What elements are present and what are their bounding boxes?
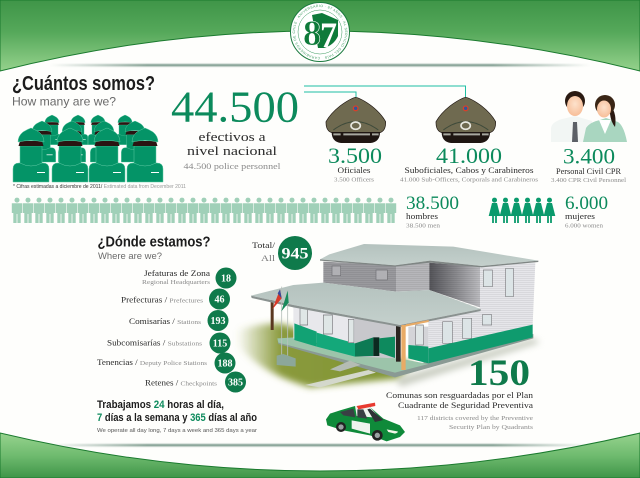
total label: Total/ bbox=[252, 240, 276, 250]
stat: officers: 3.500 Officers bbox=[334, 176, 375, 184]
total personnel figure bbox=[171, 82, 299, 171]
logo: 87 anniversary seal: 8 bbox=[303, 13, 321, 53]
text block: working hours: 7 días a la semana y 365 días al año bbox=[97, 412, 257, 424]
row: prefectures: 46 bbox=[214, 294, 224, 306]
row: substations bbox=[107, 332, 230, 354]
stat: 150 districts bbox=[386, 353, 534, 431]
row: regional headquarters: Regional Headquarters bbox=[142, 279, 211, 286]
stat: women bbox=[565, 193, 608, 230]
icon: officer cap bbox=[326, 97, 386, 143]
stat: 150 districts: 117 districts covered by the Preventive bbox=[417, 415, 533, 422]
heading: where are we: Where are we? bbox=[98, 251, 162, 262]
total badge: 945: 945 bbox=[282, 246, 308, 262]
total label bbox=[252, 240, 276, 263]
text block: working hours: Trabajamos 24 horas al día, bbox=[97, 399, 224, 411]
stat: civil personnel: Personal Civil CPR bbox=[556, 166, 621, 176]
row: checkpoints bbox=[145, 372, 246, 392]
stat: men: 38.500 men bbox=[406, 224, 440, 230]
illustration: police station building bbox=[237, 244, 540, 387]
row: regional headquarters: 18 bbox=[221, 274, 231, 284]
stat: sub-officers: Suboficiales, Cabos y Carabineros bbox=[404, 165, 534, 175]
stat: 150 districts: Comunas son resguardadas por el Plan bbox=[386, 390, 534, 400]
heading: how many are we: How many are we? bbox=[12, 94, 116, 108]
stat: officers: Oficiales bbox=[338, 165, 370, 175]
stat: women: mujeres bbox=[565, 211, 595, 221]
row: prefectures bbox=[121, 288, 230, 310]
icon: group of police officers bbox=[13, 115, 163, 182]
heading: how many are we bbox=[12, 73, 155, 108]
illustration: police car bbox=[326, 403, 405, 441]
icon: sub-officer cap bbox=[436, 97, 496, 143]
connector lines bbox=[304, 86, 466, 97]
stat: 150 districts: 150 bbox=[468, 353, 530, 394]
icon: civil personnel bbox=[551, 91, 627, 142]
pictogram: women row bbox=[489, 198, 555, 223]
text block: working hours: We operate all day long, 7 days a week and 365 days a year bbox=[97, 428, 257, 434]
total personnel figure: 44.500 police personnel bbox=[184, 161, 281, 171]
total label: All bbox=[261, 253, 276, 263]
heading: where are we: ¿Dónde estamos? bbox=[98, 234, 210, 250]
row: checkpoints: Retenes / Checkpoints bbox=[145, 378, 218, 388]
row: deputy police stations bbox=[97, 352, 236, 374]
heading: how many are we: ¿Cuántos somos? bbox=[12, 73, 155, 95]
stat: sub-officers: 41.000 Sub-Officers, Corporals and Carabineros bbox=[400, 176, 539, 184]
row: substations: 115 bbox=[213, 338, 227, 350]
pictogram: men row bbox=[12, 198, 396, 223]
stat: men: 38.500 bbox=[406, 193, 459, 214]
stat: 150 districts: Cuadrante de Seguridad Preventiva bbox=[398, 400, 533, 410]
row: substations: Subcomisarías / Substations bbox=[107, 338, 203, 348]
row: checkpoints: 385 bbox=[228, 378, 243, 388]
total personnel figure: nivel nacional bbox=[187, 143, 277, 158]
logo: 87 anniversary seal: 7 bbox=[320, 15, 337, 55]
row: stations: 193 bbox=[210, 316, 226, 327]
heading: where are we bbox=[98, 234, 210, 262]
row: deputy police stations: 188 bbox=[218, 358, 232, 370]
stat: officers bbox=[328, 143, 382, 184]
stat: women: 6.000 women bbox=[565, 224, 603, 230]
stat: officers: 3.500 bbox=[328, 143, 382, 168]
top green banner bbox=[0, 0, 640, 71]
row: stations: Comisarías / Stations bbox=[129, 317, 202, 326]
row: regional headquarters: Jefaturas de Zona bbox=[144, 269, 211, 278]
stat: sub-officers bbox=[400, 143, 539, 184]
row: stations bbox=[129, 310, 228, 331]
stat: men: hombres bbox=[406, 211, 438, 221]
stat: sub-officers: 41.000 bbox=[436, 143, 502, 168]
stat: men bbox=[406, 193, 459, 230]
row: regional headquarters bbox=[142, 268, 236, 288]
text block: working hours bbox=[97, 399, 257, 434]
row: prefectures: Prefecturas / Prefectures bbox=[121, 296, 204, 304]
row: deputy police stations: Tenencias / Deputy Police Stations bbox=[97, 358, 208, 367]
footnote: estimated data: * Cifras estimadas a diciembre de 2011/ Estimated data from December 2011 bbox=[13, 184, 186, 190]
total personnel figure: efectivos a bbox=[198, 129, 266, 144]
stat: civil personnel bbox=[551, 144, 626, 184]
stat: women: 6.000 bbox=[565, 193, 608, 214]
bottom green banner bbox=[0, 433, 640, 478]
stat: civil personnel: 3.400 bbox=[563, 144, 615, 168]
total badge: 945 bbox=[278, 236, 312, 270]
total personnel figure: 44.500 bbox=[171, 82, 299, 132]
stat: 150 districts: Security Plan by Quadrants bbox=[449, 424, 534, 431]
logo: 87 anniversary seal: CARABINEROS DE CHILE · ANIVERSARIO · 87 AÑOS · AL SERVICIO DEL PAÍS bbox=[292, 4, 348, 60]
stat: civil personnel: 3.400 CPR Civil Personnel bbox=[551, 178, 626, 184]
